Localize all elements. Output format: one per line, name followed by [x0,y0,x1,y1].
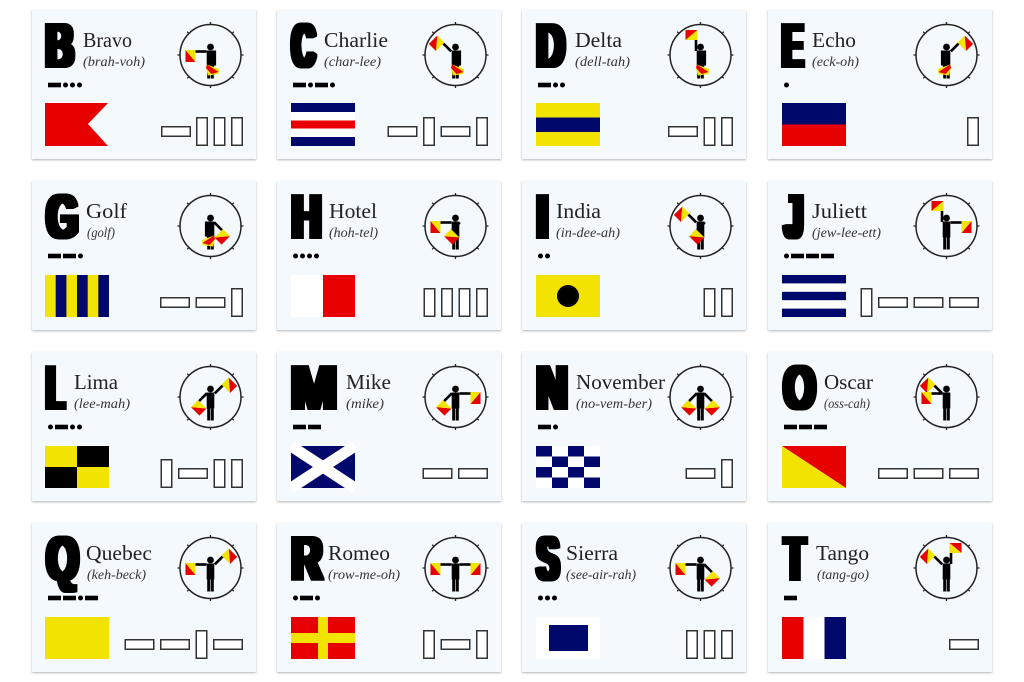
flag: Delta [536,103,600,146]
morse code [784,425,827,429]
name: Quebec [86,541,152,565]
morse code [784,82,789,88]
morse code [48,596,98,600]
pronunciation: (keh-beck) [87,567,147,582]
pronunciation: (in-dee-ah) [556,225,621,240]
letter N: N [537,354,568,423]
semaphore figure [422,193,488,259]
letter Q: Q [47,525,78,594]
flag: Golf [45,275,109,317]
semaphore figure [914,22,980,88]
signal bars [704,289,732,316]
panel: Delta [522,10,746,159]
pronunciation: (dell-tah) [575,54,631,69]
pronunciation: (brah-voh) [83,54,146,69]
panel: Hotel [277,181,501,330]
signal bars [861,289,978,316]
semaphore figure [668,364,734,430]
flag: India [536,275,600,317]
panel: Juliett [768,181,992,330]
semaphore figure [914,193,980,259]
signal bars [162,118,242,145]
pronunciation: (eck-oh) [812,54,860,69]
flag: Bravo [45,103,108,146]
panel: Romeo [277,523,501,672]
pronunciation: (see-air-rah) [566,567,636,582]
semaphore figure [422,364,488,430]
signal bars [950,640,978,649]
flag: Quebec [45,617,109,659]
morse code [293,425,321,429]
semaphore figure [178,364,244,430]
flag: Charlie [291,103,355,146]
pronunciation: (hoh-tel) [329,225,379,240]
morse code [48,254,83,258]
flag: Juliett [782,275,846,317]
panel: November [522,352,746,501]
signal bars [968,118,978,145]
flag: Oscar [782,446,846,488]
semaphore figure [178,193,244,259]
letter D: D [537,12,565,81]
panel: Tango [768,523,992,672]
pronunciation: (oss-cah) [824,396,870,411]
morse code [48,424,82,430]
signal bars [423,469,487,478]
flag: Mike [291,446,355,488]
letter I: I [536,183,548,252]
semaphore figure [422,535,488,601]
morse code [48,82,82,88]
morse code [784,596,797,600]
pronunciation: (lee-mah) [74,396,131,411]
name: Lima [74,370,119,394]
morse code [538,596,557,600]
panel: Lima: L [46,354,64,423]
panel: Sierra [522,523,746,672]
flag: Tango [782,617,846,659]
morse code [538,254,550,258]
name: Sierra [566,541,619,565]
semaphore figure [668,193,734,259]
signal bars [424,631,487,658]
flag: November [536,446,600,488]
panel: Echo [768,10,992,159]
pronunciation: (mike) [346,396,385,411]
flag: Sierra [536,617,600,659]
semaphore figure [178,535,244,601]
morse code [538,82,565,88]
semaphore figure [914,535,980,601]
letter J: J [785,183,803,252]
name: Juliett [812,199,867,223]
panel: Echo: E [782,12,803,81]
letter G: G [47,183,78,252]
letter B: B [46,12,74,81]
signal bars [424,289,487,316]
name: Romeo [328,541,390,565]
signal bars [879,469,978,478]
morse code [293,254,319,258]
name: Charlie [324,28,388,52]
semaphore figure [422,22,488,88]
letter T: T [785,525,805,594]
flag: Romeo [291,617,355,659]
letter R: R [292,525,322,594]
panel: Oscar [768,352,992,501]
letter O: O [784,354,815,423]
flag: Echo [782,103,846,146]
flag: Lima [45,446,109,488]
semaphore figure [668,535,734,601]
panel: India [522,181,746,330]
name: Tango [816,541,869,565]
name: Echo [812,28,856,52]
letter S: S [537,525,559,594]
signal bars [161,289,242,316]
panel: Charlie [277,10,501,159]
semaphore figure [914,364,980,430]
letter H: H [292,183,321,252]
morse code [293,596,320,600]
name: Golf [86,199,127,223]
signal bars [388,118,487,145]
pronunciation: (no-vem-ber) [576,396,653,411]
panel: Mike [277,352,501,501]
name: Bravo [83,28,132,52]
panel: Quebec [32,523,256,672]
semaphore figure [668,22,734,88]
letter C: C [292,12,315,81]
name: Delta [575,28,623,52]
signal bars [687,631,732,658]
pronunciation: (tang-go) [817,567,870,582]
pronunciation: (jew-lee-ett) [812,225,882,240]
semaphore figure [178,22,244,88]
panel: Lima [32,352,256,501]
morse code [538,424,558,430]
pronunciation: (golf) [87,225,115,240]
name: India [556,199,602,223]
pronunciation: (char-lee) [324,54,382,69]
signal bars [669,118,732,145]
signal bars [125,631,242,658]
panel: Golf [32,181,256,330]
flag: Hotel [291,275,355,317]
signal bars [686,460,732,487]
morse code [293,82,335,88]
pronunciation: (row-me-oh) [328,567,401,582]
signal bars [161,460,242,487]
morse code [784,254,834,258]
letter M: M [291,354,337,423]
name: Hotel [329,199,377,223]
name: Mike [346,370,391,394]
panel: Bravo [32,10,256,159]
name: November [576,370,665,394]
name: Oscar [824,370,873,394]
